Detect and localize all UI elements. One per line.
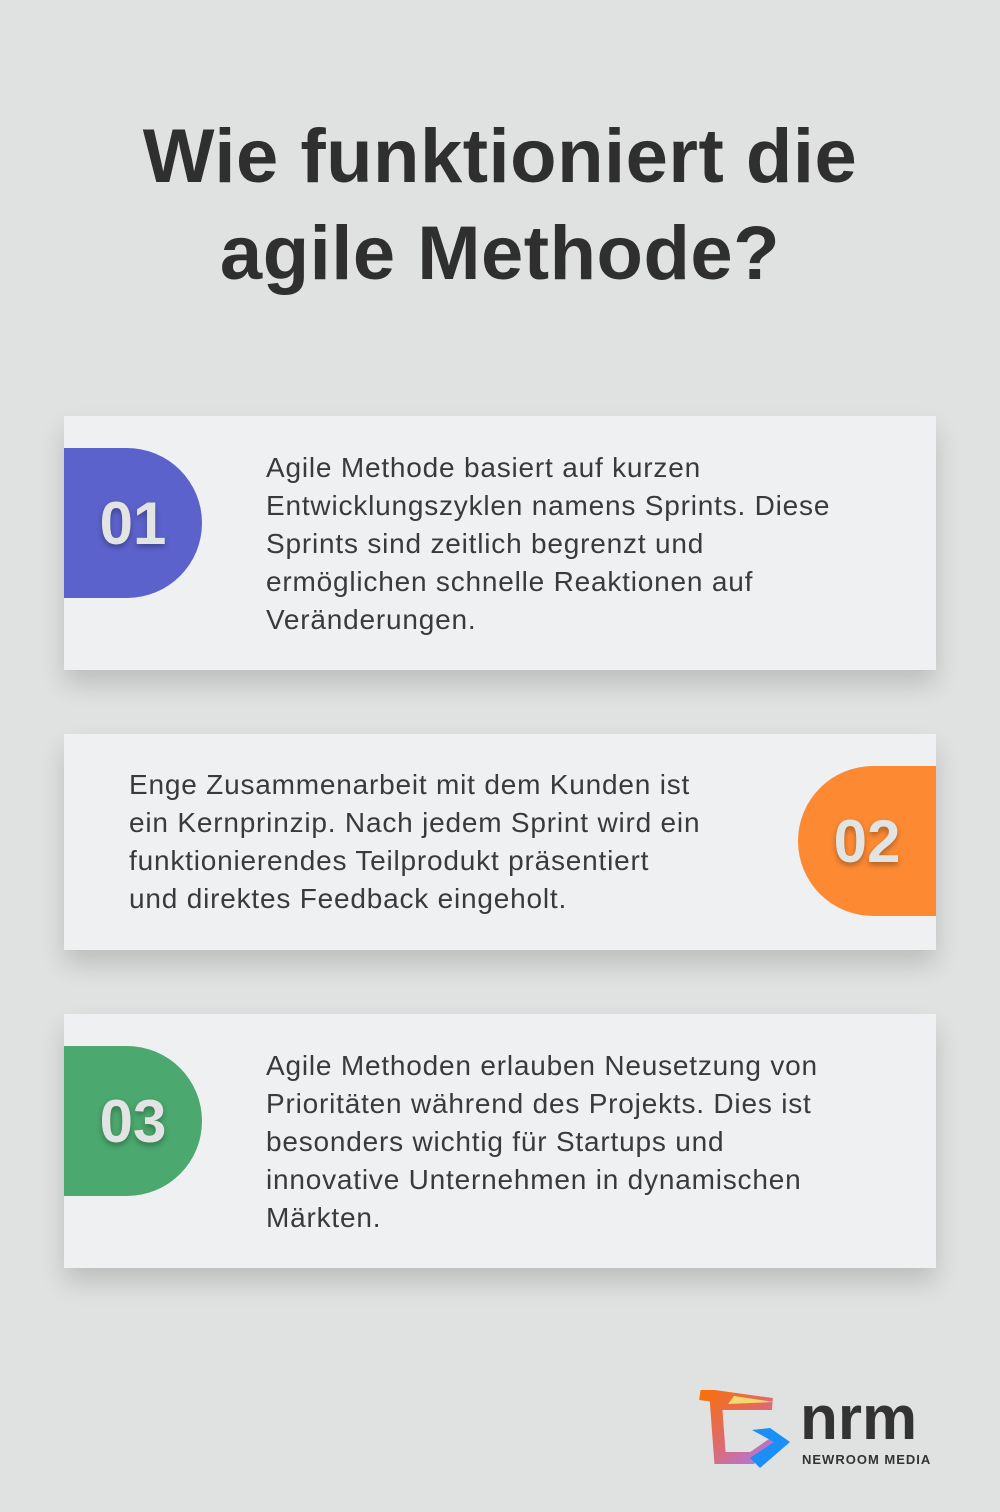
text 2: funktionierendes Teilprodukt präsentiert (129, 845, 649, 876)
badge 03 (64, 1046, 202, 1196)
text 1: Veränderungen. (266, 604, 476, 635)
panel: card 2 (64, 734, 936, 950)
panel: card 3 (64, 1014, 936, 1268)
title: agile Methode? (220, 211, 780, 296)
text 3 (266, 1050, 818, 1233)
badge 02: 02 (834, 808, 900, 874)
text 1: ermöglichen schnelle Reaktionen auf (266, 566, 753, 597)
text 3: Prioritäten während des Projekts. Dies ist (266, 1088, 812, 1119)
icon: logo mark (699, 1390, 790, 1468)
text 2: ein Kernprinzip. Nach jedem Sprint wird ein (129, 807, 700, 838)
panel: card 1 (64, 416, 936, 670)
text 3: innovative Unternehmen in dynamischen (266, 1164, 801, 1195)
text 1: Agile Methode basiert auf kurzen (266, 452, 701, 483)
text 2: und direktes Feedback eingeholt. (129, 883, 567, 914)
title: Wie funktioniert die (143, 114, 857, 199)
text 3: Märkten. (266, 1202, 381, 1233)
badge 02 (798, 766, 936, 916)
text 3: besonders wichtig für Startups und (266, 1126, 724, 1157)
badge 03: 03 (100, 1088, 166, 1154)
text 3: Agile Methoden erlauben Neusetzung von (266, 1050, 818, 1081)
logo (699, 1384, 931, 1468)
text 2 (129, 769, 700, 914)
badge 01 (64, 448, 202, 598)
text 1 (266, 452, 830, 635)
badge 01: 01 (100, 490, 166, 556)
text 2: Enge Zusammenarbeit mit dem Kunden ist (129, 769, 690, 800)
text 1: Sprints sind zeitlich begrenzt und (266, 528, 704, 559)
title (142, 114, 857, 296)
logo: NEWROOM MEDIA (802, 1452, 931, 1467)
brand text: nrm (800, 1384, 917, 1453)
text 1: Entwicklungszyklen namens Sprints. Diese (266, 490, 830, 521)
